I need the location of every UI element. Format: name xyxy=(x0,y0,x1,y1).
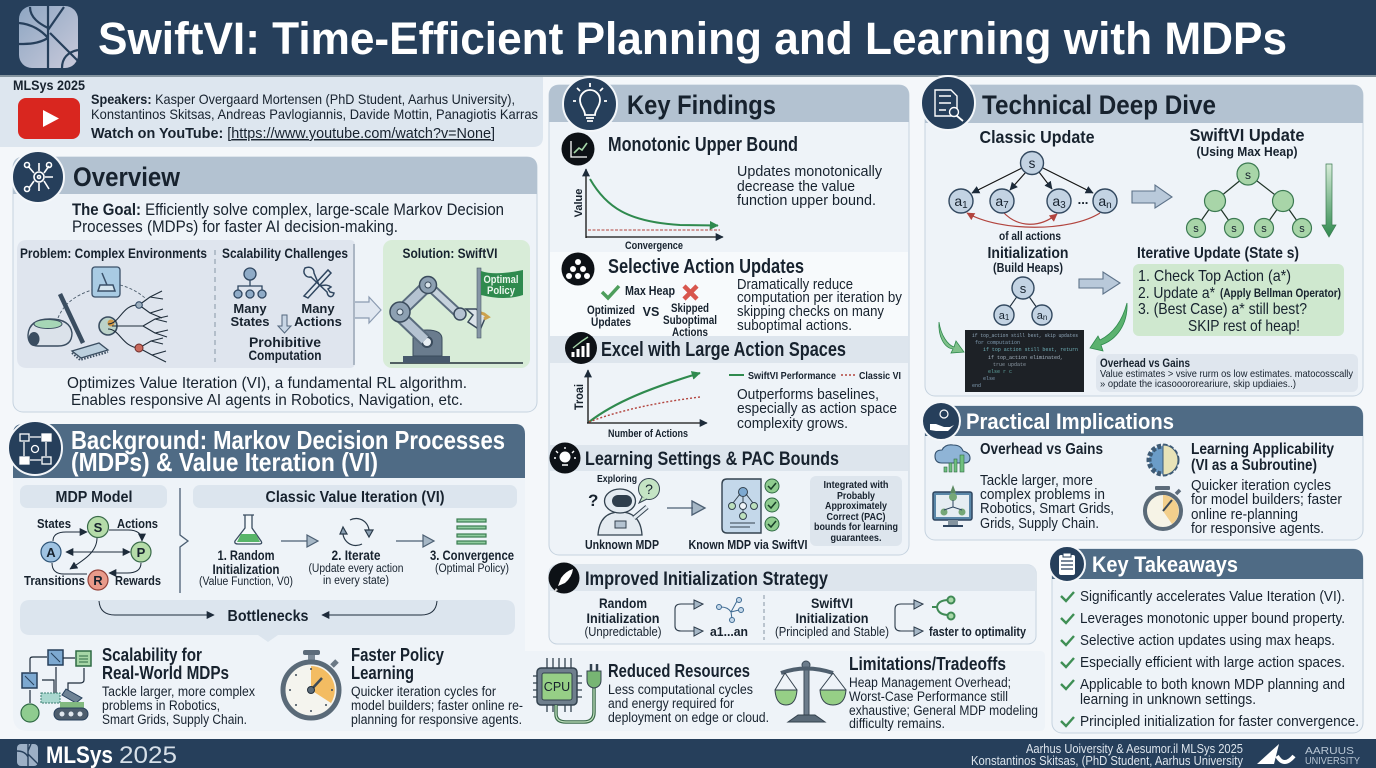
text: reduced resources: Reduced Resources xyxy=(608,661,750,681)
finding: selective action updates xyxy=(550,252,908,339)
speakers strip: MLSys 2025 xyxy=(13,78,85,93)
icon: convergence lines xyxy=(457,519,486,544)
finding: learning settings and PAC bounds: Exploring xyxy=(597,473,637,485)
classic update diagram: 7 xyxy=(1003,200,1009,211)
arrow xyxy=(1079,272,1120,294)
swiftVI initialization: faster to optimality xyxy=(929,624,1027,639)
classic update diagram: of all actions xyxy=(999,229,1061,243)
text: many states, many actions: Many xyxy=(233,301,267,316)
text: faster policy learning: Learning xyxy=(351,663,414,683)
initialization diagram: s xyxy=(1020,281,1027,296)
icon: gear brain xyxy=(1149,445,1178,475)
finding: selective action updates: VS xyxy=(643,305,659,319)
classic update diagram: ... xyxy=(1078,192,1088,207)
icon: green check xyxy=(602,286,619,298)
learning applicability: (VI as a Subroutine) xyxy=(1191,457,1317,474)
random initialization: a1...an xyxy=(710,624,748,639)
callout: PAC: bounds for learning xyxy=(814,521,898,533)
text: reduced resources: and energy required for xyxy=(608,696,734,711)
classic update diagram: Classic Update xyxy=(980,127,1095,147)
chart: value convergence xyxy=(573,169,723,252)
code block: for computation xyxy=(975,340,1020,346)
finding: selective action updates: Actions xyxy=(672,327,708,339)
heading: technical deep dive: Technical Deep Dive xyxy=(982,90,1216,120)
legend: Classic VI xyxy=(859,370,901,382)
finding: learning settings and PAC bounds: Unknown MDP xyxy=(585,538,659,552)
swiftVI update diagram: s xyxy=(1193,223,1199,235)
iterative update box: 1. Check Top Action (a*) xyxy=(1138,268,1291,285)
divider chevron xyxy=(180,488,188,593)
icon: cloud chart xyxy=(935,445,970,472)
icon: background flow xyxy=(8,421,62,475)
chart: value convergence: Value xyxy=(573,189,585,217)
logo: Aarhus University xyxy=(1257,744,1360,767)
classic update diagram: n xyxy=(1106,200,1112,211)
finding: learning settings and PAC bounds: Known MDP via SwiftVI xyxy=(688,538,808,552)
callout: overhead vs gains: » opdate the icasooororeariure, skip updiaies..) xyxy=(1100,378,1296,390)
list: takeaways: Applicable to both known MDP planning and xyxy=(1080,676,1345,693)
list: takeaways: Selective action updates using max heaps. xyxy=(1080,632,1335,649)
code block: else r c xyxy=(988,369,1012,375)
overhead vs gains: Tackle larger, more xyxy=(980,472,1093,489)
finding: monotonic upper bound: Updates monotonically xyxy=(737,163,882,180)
initialization diagram: 1 xyxy=(1005,313,1010,322)
text: limitations xyxy=(849,654,1038,731)
MDP model: MDP Model xyxy=(56,489,132,506)
icon: rocket xyxy=(548,562,580,594)
step labels: (Update every action xyxy=(308,563,404,575)
classic value iteration: Classic Value Iteration (VI) xyxy=(266,489,444,506)
text: faster policy learning: model builders; faster online re- xyxy=(351,698,523,713)
step labels xyxy=(199,548,514,588)
text: limitations: exhaustive; General MDP modeling xyxy=(849,703,1038,718)
overhead vs gains: Robotics, Smart Grids, xyxy=(980,500,1114,517)
legend xyxy=(729,370,901,382)
text: limitations: difficulty remains. xyxy=(849,716,945,731)
sub-panel: solution xyxy=(383,240,530,368)
callout: PAC xyxy=(810,476,902,546)
legend: SwiftVI Performance xyxy=(748,370,836,382)
heading: background: Background: Markov Decision Processes xyxy=(71,425,505,455)
icon: CPU with plug xyxy=(533,658,601,722)
bottlenecks bar: Bottlenecks xyxy=(228,608,309,625)
finding: selective action updates: Dramatically reduce xyxy=(737,277,853,293)
icon: balance scale xyxy=(775,661,846,722)
swiftVI initialization: (Principled and Stable) xyxy=(775,625,889,639)
text: reduced resources: Less computational cycles xyxy=(608,682,753,697)
header banner xyxy=(0,0,1376,77)
finding: excel with large action spaces: complexity grows. xyxy=(737,415,848,432)
finding: monotonic upper bound: function upper bound. xyxy=(737,192,876,209)
classic update diagram: 1 xyxy=(962,200,968,211)
panel: key findings xyxy=(549,77,909,555)
icon: known MDP document xyxy=(722,479,779,533)
footer: Aarhus Uoiversity & Aesumor.il MLSys 2025 xyxy=(1026,742,1243,756)
finding: excel with large action spaces: Outperforms baselines, xyxy=(737,386,879,403)
icon: cluster xyxy=(562,252,594,286)
sub-panel: problem and scalability: Problem: Complex Environments xyxy=(20,246,207,261)
step labels: 1. Random xyxy=(218,548,274,563)
finding: monotonic upper bound: Monotonic Upper Bound xyxy=(608,134,798,156)
finding: selective action updates: Max Heap xyxy=(625,284,675,298)
text: overview summary: Enables responsive AI agents in Robotics, Navigation, etc. xyxy=(71,392,463,409)
list: takeaways: Leverages monotonic upper bound property. xyxy=(1080,610,1345,627)
text: prohibitive computation xyxy=(248,335,322,363)
swiftVI update diagram xyxy=(1186,125,1336,238)
learning applicability: for responsive agents. xyxy=(1191,520,1324,537)
sub-panel: problem and scalability: Scalability Challenges xyxy=(222,246,348,261)
footer xyxy=(0,739,1376,768)
arrow xyxy=(667,501,705,515)
classic update diagram: a xyxy=(995,193,1003,209)
finding: selective action updates: Updates xyxy=(591,317,631,329)
panel: key takeaways xyxy=(1049,546,1363,733)
classic update diagram xyxy=(949,127,1117,243)
initialization diagram xyxy=(988,245,1068,325)
text: many states, many actions: Actions xyxy=(294,314,342,329)
heading: key takeaways: Key Takeaways xyxy=(1092,552,1238,577)
text: the goal: Processes (MDPs) for faster AI decision-making. xyxy=(72,218,398,236)
code block: else xyxy=(983,376,995,382)
logo: Aarhus University: UNIVERSITY xyxy=(1305,756,1360,767)
logo: SwiftVI mark xyxy=(19,6,78,68)
learning applicability: Quicker iteration cycles xyxy=(1191,477,1331,494)
swiftVI update diagram: (Using Max Heap) xyxy=(1196,145,1298,159)
chart: performance vs actions: Troai xyxy=(574,384,586,410)
text: faster policy learning xyxy=(351,645,523,727)
icon: idea xyxy=(550,442,580,474)
classic update diagram: s xyxy=(1029,156,1036,171)
sub-panel: problem and scalability xyxy=(17,240,355,368)
MDP model: A xyxy=(46,545,56,560)
icon: flask xyxy=(235,515,262,544)
learning applicability: for model builders; faster xyxy=(1191,491,1342,508)
code block: true update xyxy=(993,362,1026,368)
iterative update box: 3. (Best Case) a* still best? xyxy=(1138,301,1307,318)
step labels: 3. Convergence xyxy=(430,548,514,563)
icon: hand with coin xyxy=(922,402,960,440)
icon: document magnifier xyxy=(921,76,975,130)
icon: growth bars xyxy=(565,332,597,364)
text: many states, many actions: States xyxy=(230,314,270,329)
icon: red cross xyxy=(684,286,697,299)
callout: PAC: Probably xyxy=(837,490,875,502)
step labels: Initialization xyxy=(212,562,280,577)
finding: learning settings and PAC bounds: Learning Settings & PAC Bounds xyxy=(585,448,839,470)
icon: monitor xyxy=(933,485,972,527)
heading: background: (MDPs) & Value Iteration (VI) xyxy=(71,447,378,477)
classic update diagram: 3 xyxy=(1060,200,1066,211)
callout: PAC: Correct (PAC) xyxy=(826,511,886,523)
iterative update box xyxy=(1133,245,1344,336)
overhead vs gains: Overhead vs Gains xyxy=(980,441,1103,458)
finding: excel with large action spaces xyxy=(550,332,908,440)
text: faster policy learning: planning for responsive agents. xyxy=(351,712,522,727)
finding: selective action updates: Suboptimal xyxy=(663,315,717,327)
arrow: green right xyxy=(1090,303,1127,351)
overhead vs gains: complex problems in xyxy=(980,486,1105,503)
text: scalability: problems in Robotics, xyxy=(102,698,220,713)
icon: robot arm with flag xyxy=(390,268,523,363)
text: scalability: Real-World MDPs xyxy=(102,663,229,683)
swiftVI initialization xyxy=(775,595,1027,639)
finding: monotonic upper bound xyxy=(562,132,882,252)
icon: stopwatch xyxy=(283,650,339,718)
learning applicability: online re-planning xyxy=(1191,506,1298,523)
arrow: to solution xyxy=(355,297,381,323)
iterative update box: (Apply Bellman Operator) xyxy=(1220,288,1341,300)
callout: PAC: Integrated with xyxy=(824,479,888,491)
callout: overhead vs gains xyxy=(1096,354,1358,392)
sub-panel: solution: Solution: SwiftVI xyxy=(402,246,498,261)
finding: selective action updates: computation per iteration by xyxy=(737,290,903,306)
title: SwiftVI: Time-Efficient Planning and Learning with MDPs xyxy=(98,13,1287,64)
text: faster policy learning: Faster Policy xyxy=(351,645,444,665)
icon: scalability xyxy=(21,650,91,722)
text: prohibitive computation: Prohibitive xyxy=(249,335,322,350)
speakers strip: Watch on YouTube: [https://www.youtube.com/watch?v=None] xyxy=(91,126,495,142)
random initialization: Random xyxy=(599,595,647,611)
step labels: in every state) xyxy=(323,575,389,587)
chart: performance vs actions xyxy=(574,370,707,440)
swiftVI initialization: Initialization xyxy=(796,610,868,626)
speakers strip: Konstantinos Skitsas, Andreas Pavlogiannis, Davide Mottin, Panagiotis Karras xyxy=(91,106,538,122)
finding: selective action updates: Optimized xyxy=(587,305,635,317)
code block: if top_action still best, skip updates xyxy=(972,333,1078,339)
classic update diagram: a xyxy=(1052,193,1060,209)
text: limitations: Heap Management Overhead; xyxy=(849,675,1011,690)
text: scalability: Smart Grids, Supply Chain. xyxy=(102,712,247,727)
classic value iteration xyxy=(193,485,517,588)
iterative update box: 2. Update a* xyxy=(1138,285,1215,302)
bottlenecks bar xyxy=(20,600,515,642)
text: faster policy learning: Quicker iteration cycles for xyxy=(351,684,496,699)
icon: robot arm with flag: Optimal xyxy=(484,274,518,286)
list: takeaways: Significantly accelerates Value Iteration (VI). xyxy=(1080,588,1345,605)
swiftVI initialization: SwiftVI xyxy=(811,595,853,611)
MDP model: S xyxy=(94,520,103,535)
text: limitations: Worst-Case Performance still xyxy=(849,689,1008,704)
icon: many actions tools xyxy=(304,267,334,298)
list: takeaways: Especially efficient with large action spaces. xyxy=(1080,654,1345,671)
text: scalability: Scalability for xyxy=(102,645,202,665)
text: scalability xyxy=(102,645,255,727)
icon: robot explorer: ? xyxy=(588,491,598,510)
classic update diagram: a xyxy=(1098,193,1106,209)
heading: practical implications: Practical Implications xyxy=(966,409,1174,434)
text: prohibitive computation: Computation xyxy=(248,348,322,363)
swiftVI update diagram: s xyxy=(1299,223,1305,235)
swiftVI update diagram: s xyxy=(1261,223,1267,235)
swiftVI update diagram: s xyxy=(1245,168,1251,182)
icon: overview network xyxy=(12,151,64,203)
random initialization: Initialization xyxy=(586,610,660,626)
footer logo xyxy=(17,744,38,766)
panel: background xyxy=(8,421,1045,731)
iterative update box: SKIP rest of heap! xyxy=(1188,318,1300,335)
panel: overview xyxy=(12,151,537,412)
panel: improved initialization strategy: Improved Initialization Strategy xyxy=(585,568,828,590)
text: reduced resources: deployment on edge or cloud. xyxy=(608,710,769,725)
step labels: 2. Iterate xyxy=(332,548,381,563)
finding: selective action updates: skipping checks on many xyxy=(737,304,885,320)
icon: cycle xyxy=(340,518,373,546)
chart: value convergence: Convergence xyxy=(625,240,683,252)
panel: practical implications xyxy=(922,402,1363,540)
icon: light bulb xyxy=(563,77,617,131)
MDP model: P xyxy=(137,545,146,560)
text: overview summary: Optimizes Value Iteration (VI), a fundamental RL algorithm. xyxy=(67,375,467,392)
panel: technical deep dive xyxy=(921,76,1363,396)
callout: overhead vs gains: Overhead vs Gains xyxy=(1100,358,1190,370)
list: takeaways: learning in unknown settings. xyxy=(1080,691,1256,708)
icon: robot arm with flag: Policy xyxy=(487,285,516,297)
icon: many states xyxy=(234,268,266,298)
arrow xyxy=(1132,185,1172,208)
learning applicability: Learning Applicability xyxy=(1191,441,1334,458)
initialization diagram: (Build Heaps) xyxy=(993,261,1063,275)
icon: robot vacuum and tree xyxy=(28,267,168,362)
code block xyxy=(965,330,1084,392)
text: reduced resources xyxy=(608,661,769,725)
learning applicability xyxy=(1191,441,1342,537)
code block: if top action still best, return xyxy=(983,347,1078,353)
classic update diagram: a xyxy=(954,193,962,209)
heading: background xyxy=(71,425,505,477)
initialization diagram: Initialization xyxy=(988,245,1068,262)
speakers strip: Speakers: Kasper Overgaard Mortensen (PhD Student, Aarhus University), xyxy=(91,91,515,107)
heading: overview: Overview xyxy=(73,162,181,192)
code block: end xyxy=(972,383,981,389)
code block: if top_action eliminated, xyxy=(988,355,1063,361)
icon: YouTube play button xyxy=(18,98,80,139)
text: the goal: The Goal: Efficiently solve complex, large-scale Markov Decision xyxy=(72,201,504,219)
step labels: (Value Function, V0) xyxy=(199,576,293,588)
initialization diagram: a xyxy=(999,310,1005,322)
overhead vs gains: Grids, Supply Chain. xyxy=(980,515,1099,532)
icon: line chart xyxy=(562,132,594,166)
MDP model: States xyxy=(37,517,71,531)
finding: learning settings and PAC bounds xyxy=(550,442,908,552)
swiftVI update diagram: SwiftVI Update xyxy=(1190,125,1305,145)
icon: clipboard xyxy=(1049,546,1085,582)
icon: robot explorer: ? xyxy=(645,481,653,497)
footer: Konstantinos Skitsas, (PhD Student, Aarhus University xyxy=(971,754,1244,768)
MDP model xyxy=(20,485,167,590)
callout: PAC: guarantees. xyxy=(830,532,882,544)
MDP model: Actions xyxy=(117,517,158,531)
text: many states, many actions xyxy=(230,301,342,333)
initialization diagram: n xyxy=(1043,313,1047,322)
icon: CPU with plug: CPU xyxy=(544,680,570,694)
heading: key findings: Key Findings xyxy=(627,90,776,120)
random initialization: (Unpredictable) xyxy=(584,625,662,639)
text: limitations: Limitations/Tradeoffs xyxy=(849,654,1006,674)
MDP model: Rewards xyxy=(115,574,161,588)
MDP model: Transitions xyxy=(24,574,85,588)
finding: excel with large action spaces: Excel with Large Action Spaces xyxy=(601,339,846,361)
logo: Aarhus University: AARUUS xyxy=(1305,746,1354,757)
text: overview summary xyxy=(67,375,467,409)
arrow xyxy=(281,535,318,547)
icon: robot explorer xyxy=(588,478,660,535)
initialization diagram: a xyxy=(1037,310,1043,322)
random initialization xyxy=(584,595,748,639)
panel: improved initialization strategy xyxy=(548,562,1036,644)
step labels: (Optimal Policy) xyxy=(435,563,509,575)
arrow: green left xyxy=(939,322,964,353)
finding: selective action updates: suboptimal actions. xyxy=(737,318,852,334)
callout: PAC: Approximately xyxy=(825,500,887,512)
finding: excel with large action spaces: especially as action space xyxy=(737,400,897,417)
chart: performance vs actions: Number of Actions xyxy=(608,428,688,440)
overhead vs gains xyxy=(980,441,1114,532)
text: the goal xyxy=(72,201,504,236)
icon: small stopwatch xyxy=(1145,486,1181,529)
swiftVI update diagram: s xyxy=(1231,223,1237,235)
iterative update box: Iterative Update (State s) xyxy=(1137,245,1299,262)
MDP model: R xyxy=(93,573,103,588)
text: many states, many actions: Many xyxy=(301,301,335,316)
list: takeaways xyxy=(1061,588,1359,730)
finding: selective action updates: Selective Action Updates xyxy=(608,256,804,278)
text: scalability: Tackle larger, more complex xyxy=(102,684,255,699)
finding: monotonic upper bound: decrease the value xyxy=(737,178,855,195)
speakers strip xyxy=(0,77,543,147)
finding: selective action updates: Skipped xyxy=(671,303,709,315)
arrow xyxy=(396,535,434,547)
